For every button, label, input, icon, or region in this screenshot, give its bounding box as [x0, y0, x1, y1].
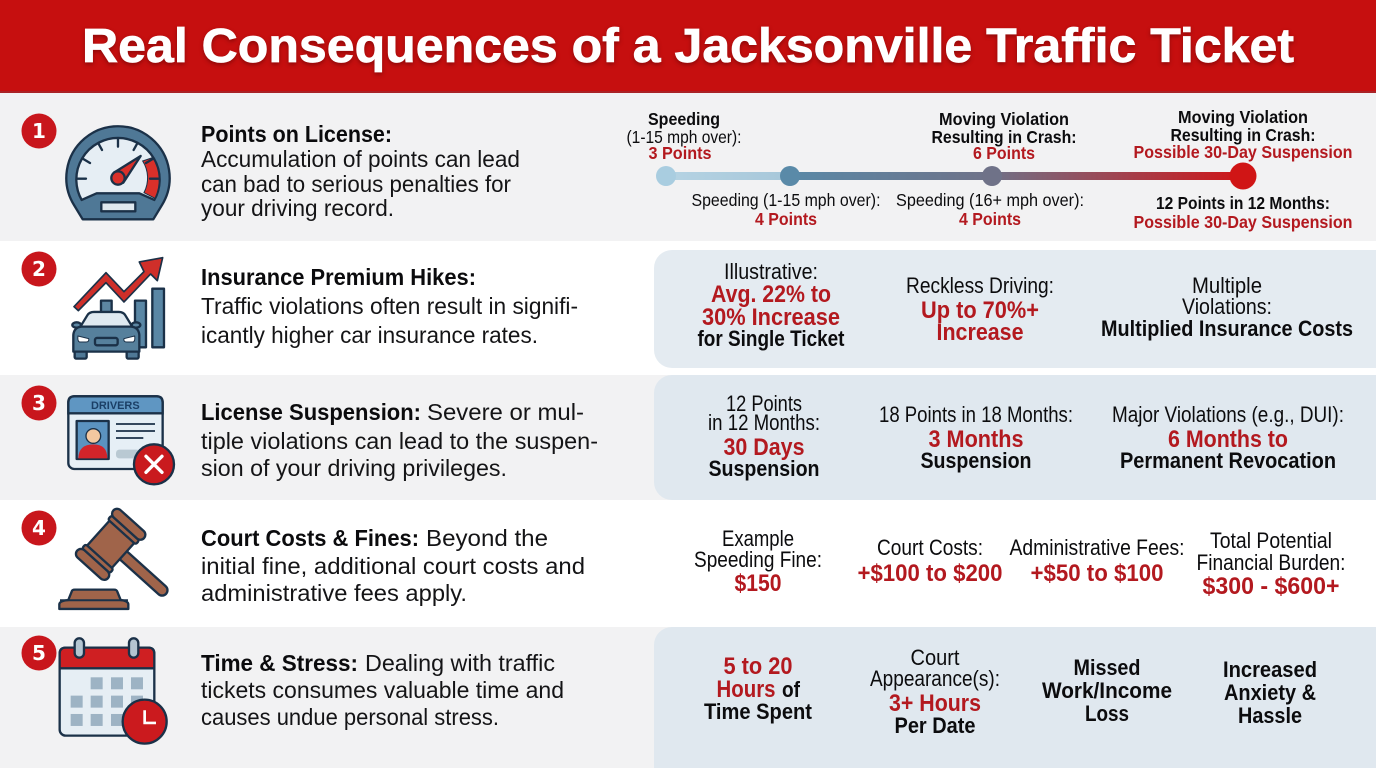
text: points on license: Accumulation of points can lead [201, 146, 520, 172]
timeline label: speeding 16+ 4 points: 4 Points [959, 209, 1021, 229]
text: insurance premium hikes: Traffic violations often result in signifi- [201, 293, 578, 319]
timeline label: crash 6 points: Moving Violation [939, 109, 1069, 129]
stat: single ticket: Illustrative: [724, 259, 818, 284]
stat: single ticket [698, 259, 845, 351]
stat: major violations: Major Violations (e.g., DUI): [1112, 402, 1344, 427]
timeline label: speeding 3 points: (1-15 mph over): [626, 127, 742, 147]
stat: reckless driving: Up to 70%+ [921, 297, 1039, 324]
stat: court appearance: 3+ Hours [889, 690, 981, 717]
stat: total burden: $300 - $600+ [1202, 573, 1340, 600]
stat: anxiety: Increased [1223, 657, 1317, 682]
icon: car with rising arrow [72, 258, 164, 359]
stat: speeding fine: $150 [734, 570, 782, 597]
icon: speedometer [66, 126, 170, 219]
text: court costs and fines [201, 525, 585, 606]
stat: 18 points [879, 402, 1073, 473]
badge 5: 5 [32, 641, 46, 665]
badge 1: 1 [32, 119, 46, 143]
stat: 12 points: in 12 Months: [708, 410, 820, 435]
stat: hours spent: Hours [716, 676, 776, 703]
stat: missed work: Loss [1085, 701, 1129, 726]
text: license suspension [201, 399, 598, 481]
timeline label: 12 points suspension [1134, 193, 1352, 232]
text: time and stress: Dealing with traffic [365, 650, 555, 676]
badge 2 [22, 252, 56, 286]
stat: hours spent: Time Spent [704, 699, 812, 724]
stat: court appearance [870, 645, 1000, 738]
stat: administrative fees: +$50 to $100 [1030, 560, 1164, 587]
stat: 12 points: Suspension [708, 456, 820, 481]
icon: gavel [59, 507, 187, 618]
text: insurance premium hikes: Insurance Premium Hikes: [201, 264, 476, 290]
stat: major violations: Permanent Revocation [1120, 448, 1336, 473]
stat: court costs: +$100 to $200 [858, 560, 1002, 587]
timeline label: speeding 3 points: 3 Points [648, 143, 712, 163]
text: time and stress [201, 650, 564, 730]
timeline label: crash suspension: Moving Violation [1178, 107, 1308, 127]
text: points on license: your driving record. [201, 195, 394, 221]
stat: missed work: Missed [1074, 655, 1140, 680]
timeline label: speeding 4 points: Speeding (1-15 mph over): [692, 190, 880, 210]
timeline label: crash 6 points: Resulting in Crash: [932, 127, 1076, 147]
text: court costs and fines: administrative fees apply. [201, 580, 467, 606]
badge 3: 3 [32, 391, 46, 415]
stat: total burden: Financial Burden: [1196, 550, 1346, 575]
text: insurance premium hikes [201, 264, 578, 348]
stat: administrative fees: Administrative Fees: [1010, 535, 1184, 560]
timeline label: crash 6 points [932, 109, 1076, 163]
stat: reckless driving [906, 273, 1054, 346]
row 1: points on license [0, 93, 1376, 241]
chart: points timeline [626, 107, 1352, 232]
text: points on license [201, 121, 520, 221]
panel: suspension stats [654, 375, 1376, 500]
text: insurance premium hikes: icantly higher car insurance rates. [201, 322, 538, 348]
text: time and stress: causes undue personal stress. [201, 704, 499, 730]
badge 5 [22, 636, 56, 670]
timeline label: crash suspension: Possible 30-Day Suspension [1134, 142, 1352, 162]
text: license suspension: tiple violations can lead to the suspen- [201, 428, 598, 454]
timeline label: speeding 16+ 4 points [896, 190, 1084, 229]
timeline label: crash suspension: Resulting in Crash: [1170, 125, 1316, 145]
row 2: insurance premium hikes [0, 241, 1376, 375]
text: points on license: Points on License: [201, 121, 392, 147]
stat: court costs: Court Costs: [877, 535, 983, 560]
stat: single ticket: Avg. 22% to [711, 281, 831, 308]
row 4: court costs and fines [0, 500, 1376, 627]
stat: major violations: 6 Months to [1168, 426, 1288, 453]
stat: 18 points: Suspension [920, 448, 1032, 473]
stat: single ticket: for Single Ticket [698, 326, 845, 351]
badge 3 [22, 386, 56, 420]
stat: 12 points [708, 391, 820, 481]
text: time and stress: Time & Stress: [201, 650, 358, 676]
stat: administrative fees [1010, 535, 1184, 587]
stat: speeding fine: Speeding Fine: [694, 547, 822, 572]
stat: reckless driving: Increase [936, 319, 1024, 346]
text: license suspension: Severe or mul- [427, 399, 584, 425]
stat: speeding fine [694, 526, 822, 597]
timeline label: speeding 4 points [692, 190, 880, 229]
stat: multiple violations: Violations: [1182, 294, 1272, 319]
stat: court appearance: Appearance(s): [870, 666, 1000, 691]
text: license suspension: sion of your driving privileges. [201, 455, 507, 481]
stat: court appearance: Per Date [894, 713, 976, 738]
text: time and stress: tickets consumes valuable time and [201, 677, 564, 703]
stat: speeding fine: Example [722, 526, 794, 551]
icon: driver license with x [68, 396, 174, 484]
stat: multiple violations [1101, 273, 1353, 341]
timeline label: speeding 16+ 4 points: Speeding (16+ mph over): [896, 190, 1084, 210]
stat: missed work [1042, 655, 1172, 726]
panel: time stats [654, 627, 1376, 768]
stat: total burden: Total Potential [1210, 528, 1332, 553]
stat: anxiety [1223, 657, 1317, 728]
stat: court appearance: Court [910, 645, 960, 670]
stat: hours spent: 5 to 20 [724, 653, 792, 680]
icon: calendar with clock [60, 638, 167, 744]
badge 4 [22, 510, 56, 546]
stat: 12 points: 12 Points [726, 391, 802, 416]
text: license suspension: License Suspension: [201, 399, 421, 425]
stat: hours spent [704, 653, 812, 724]
stat: hours spent: of [782, 677, 800, 702]
row 3: license suspension [0, 375, 1376, 500]
icon: driver license with x: DRIVERS [91, 400, 140, 412]
stats: court costs [694, 526, 1346, 600]
timeline label: 12 points suspension: 12 Points in 12 Months: [1156, 193, 1330, 213]
timeline label: speeding 3 points [626, 109, 742, 163]
header banner [0, 0, 1376, 93]
timeline label: crash 6 points: 6 Points [973, 143, 1035, 163]
panel: insurance stats [654, 250, 1376, 368]
stat: single ticket: 30% Increase [702, 304, 840, 331]
stat: reckless driving: Reckless Driving: [906, 273, 1054, 298]
badge 2: 2 [32, 257, 46, 281]
badge 1 [22, 114, 56, 148]
timeline label: crash suspension [1134, 107, 1352, 162]
stat: 12 points: 30 Days [724, 434, 804, 461]
text: court costs and fines: Beyond the [426, 525, 548, 551]
stat: missed work: Work/Income [1042, 678, 1172, 703]
row 5: time and stress [0, 627, 1376, 768]
stat: major violations [1112, 402, 1344, 473]
timeline label: speeding 4 points: 4 Points [755, 209, 817, 229]
text: court costs and fines: Court Costs & Fines: [201, 525, 419, 551]
stat: total burden [1196, 528, 1346, 600]
stat: 18 points: 3 Months [928, 426, 1024, 453]
timeline label: speeding 3 points: Speeding [648, 109, 720, 129]
text: court costs and fines: initial fine, additional court costs and [201, 553, 585, 579]
title: Real Consequences of a Jacksonville Traffic Ticket [82, 20, 1294, 73]
stat: multiple violations: Multiple [1192, 273, 1262, 298]
timeline label: 12 points suspension: Possible 30-Day Suspension [1134, 212, 1352, 232]
stat: anxiety: Hassle [1238, 703, 1302, 728]
stat: court costs [858, 535, 1002, 587]
badge 4: 4 [32, 516, 46, 540]
text: points on license: can bad to serious penalties for [201, 171, 511, 197]
stat: 18 points: 18 Points in 18 Months: [879, 402, 1073, 427]
stat: anxiety: Anxiety & [1224, 680, 1316, 705]
